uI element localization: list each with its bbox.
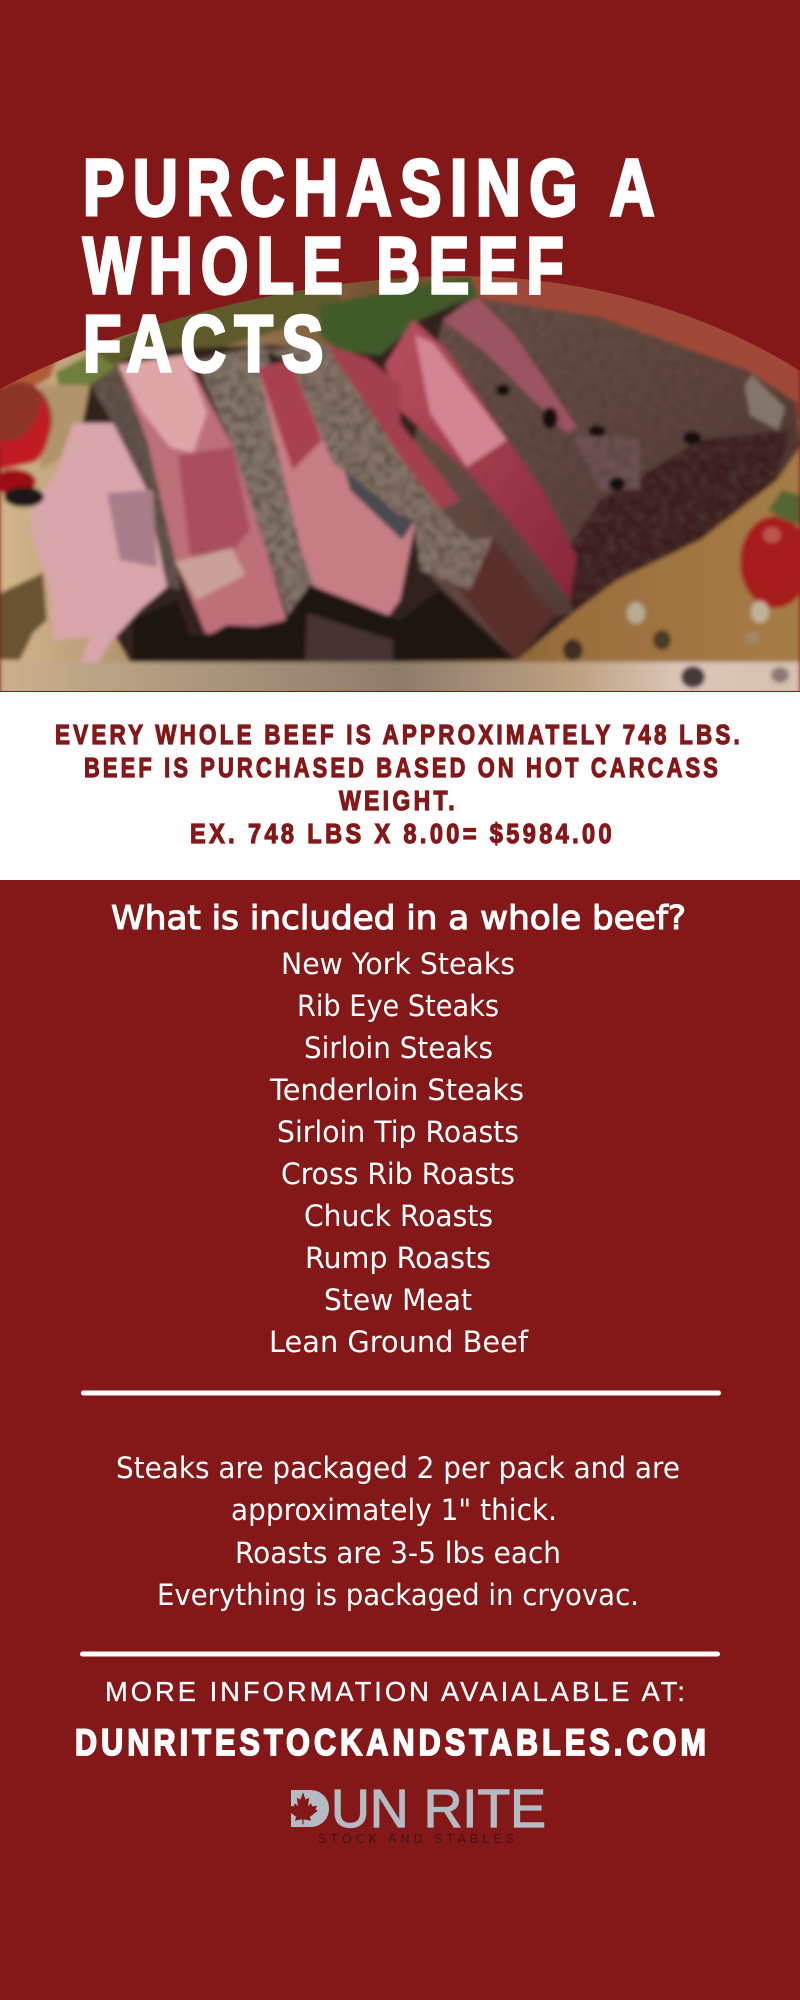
right tomato [740,516,800,608]
packaging notes: approximately 1" thick. [231,1493,557,1527]
gray knife stripe [345,470,415,540]
lower dark slice [459,540,556,657]
slice C red top [258,360,322,470]
packaging notes: Steaks are packaged 2 per pack and are [116,1451,680,1485]
panel: white price band [0,692,800,880]
slice E pale upper [118,355,207,453]
slice A pale highlight [415,335,507,467]
price explanation text: WEIGHT. [339,785,458,816]
list of beef cuts: Stew Meat [324,1283,472,1317]
logo: Dun Rite Stock and Stables: STOCK AND STABLES [318,1832,518,1846]
slice E red middle [178,447,250,560]
heading: what is included: What is included in a whole beef? [111,898,686,937]
slice A [385,320,577,600]
price explanation text [55,719,743,849]
list of beef cuts [269,947,529,1359]
packaging notes [116,1451,680,1612]
list of beef cuts: Rump Roasts [305,1241,491,1275]
list of beef cuts: Cross Rib Roasts [281,1157,515,1191]
slice C full [258,360,415,633]
list of beef cuts: Rib Eye Steaks [297,989,499,1023]
logo: Dun Rite Stock and Stables: UN RITE [331,1779,546,1839]
roast mass [400,297,800,660]
price explanation text: EX. 748 LBS X 8.00= $5984.00 [190,818,615,849]
left tomato [0,382,52,458]
gold rim of plate [98,290,342,369]
flare on crust edge [745,375,785,430]
icon: D with maple leaf [288,1790,329,1827]
far pink stripe [443,297,577,433]
board near tomato [40,385,100,470]
slice E full [118,355,287,637]
packaging notes: Everything is packaged in cryovac. [157,1578,639,1612]
title [83,143,663,388]
more information label: MORE INFORMATION AVAIALABLE AT: [105,1676,688,1707]
green asparagus [320,275,480,362]
list of beef cuts: Sirloin Tip Roasts [277,1115,519,1149]
packaging notes: Roasts are 3-5 lbs each [235,1536,561,1570]
list of beef cuts: Lean Ground Beef [269,1325,529,1359]
dark shadow under slices [133,585,513,662]
pale bottom band with salt [0,662,800,694]
crust texture [93,304,789,612]
slice B [326,345,460,510]
title: FACTS [83,299,332,388]
slice E pale lower [175,548,245,600]
list of beef cuts: Tenderloin Steaks [269,1073,524,1107]
list of beef cuts: New York Steaks [281,947,515,981]
lower roast dark [560,430,790,613]
slice G mauve patch [107,490,157,567]
slice G pale pink [30,423,167,687]
mauve patch in crust [570,430,640,490]
salt and red spice behind the meat [464,276,800,420]
crust bands [262,345,493,590]
list of beef cuts: Sirloin Steaks [304,1031,493,1065]
list of beef cuts: Chuck Roasts [304,1199,493,1233]
peppercorns on board [563,601,769,661]
sprig on board [0,573,47,660]
title: WHOLE BEEF [83,221,572,310]
dark meat underlay [80,298,573,664]
hero photo: sliced roast beef on a board [0,260,800,695]
black pepper specks [496,384,701,491]
